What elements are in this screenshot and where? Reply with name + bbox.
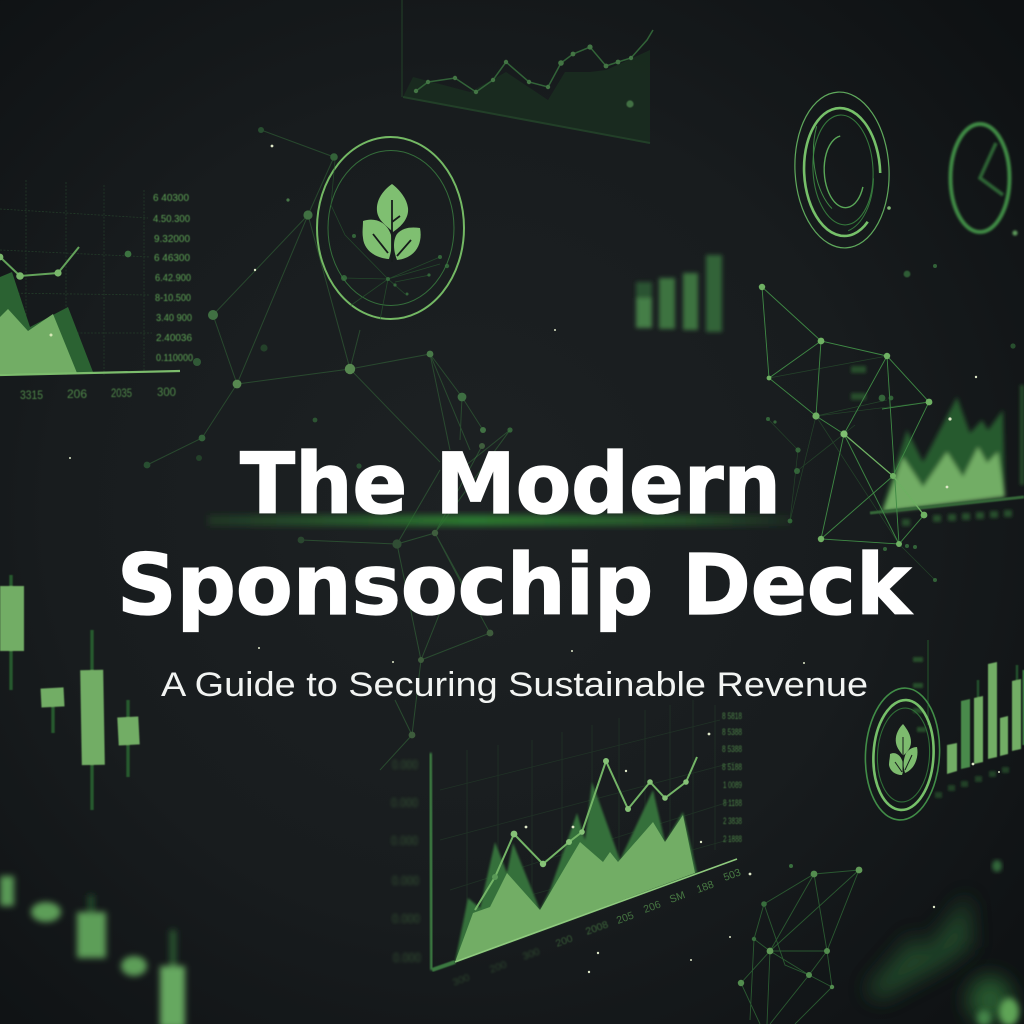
gauge dot <box>887 206 891 210</box>
bottom axis labels: 300 <box>451 971 472 989</box>
x axis labels <box>20 385 176 402</box>
right axis labels: 8 1188 <box>723 798 742 809</box>
x axis labels: 2035 <box>111 386 132 400</box>
blurred candlesticks <box>0 876 185 1024</box>
green glow streak <box>208 515 790 526</box>
y axis labels: 6 40300 <box>153 192 189 204</box>
y axis labels: 6.42.900 <box>155 272 191 284</box>
left axis labels: 0.000 <box>391 795 418 810</box>
network: left cluster <box>144 127 513 470</box>
title line 1: The Modern <box>240 435 781 533</box>
bottom axis labels: 300 <box>521 945 542 963</box>
right axis labels: 8 5818 <box>722 711 742 722</box>
right bar chart with small leaf emblem <box>862 640 1024 822</box>
right axis labels: 2 1888 <box>723 834 742 845</box>
outer ring <box>317 137 464 319</box>
left axis labels <box>391 757 421 965</box>
leaf emblem large <box>317 137 464 320</box>
subtitle: A Guide to Securing Sustainable Revenue <box>161 666 868 704</box>
network: bottom right cluster <box>738 864 862 1024</box>
left axis labels: 0.000 <box>391 833 418 848</box>
light area series <box>455 815 695 962</box>
left stock chart with axis labels <box>0 180 193 402</box>
network: center cluster <box>298 430 510 770</box>
left axis labels: 0.000 <box>393 950 421 965</box>
dark area series <box>455 782 697 962</box>
dark area series <box>0 272 93 374</box>
right axis labels: 8 5388 <box>722 744 742 755</box>
grid <box>440 700 735 930</box>
right axis labels <box>722 711 742 845</box>
x axis labels: 3315 <box>20 388 43 402</box>
panel axis <box>927 640 929 725</box>
left axis labels: 0.000 <box>392 911 420 926</box>
trend line <box>0 247 79 276</box>
x axis labels: 300 <box>157 385 176 399</box>
baseline <box>0 371 180 375</box>
y axis labels: 6 46300 <box>154 252 190 264</box>
top faded area chart <box>402 0 653 143</box>
right axis labels: 8 5188 <box>722 762 742 773</box>
bottom axis labels: 205 <box>615 909 636 927</box>
light area series <box>0 309 77 374</box>
left axis labels: 0.000 <box>392 873 419 888</box>
right axis labels: 8 5388 <box>722 727 742 738</box>
right axis labels: 2 3838 <box>723 816 742 827</box>
bottom axis labels: 503 <box>722 866 743 884</box>
y axis labels: 2.40036 <box>156 332 192 344</box>
blurred right area chart <box>851 366 1024 526</box>
right axis labels: 1 0089 <box>723 780 742 791</box>
bottom axis labels: 206 <box>642 898 663 916</box>
inner network <box>331 160 440 320</box>
left axis labels: 0.000 <box>392 757 418 772</box>
leaf icon <box>363 184 421 262</box>
y axis labels: 9.32000 <box>154 233 190 245</box>
scattered light specks <box>69 145 1000 973</box>
y axis labels: 0.110000 <box>156 352 193 364</box>
inner ring <box>328 150 454 306</box>
small leaf icon <box>889 724 918 775</box>
axes <box>430 753 432 970</box>
rings <box>862 686 943 822</box>
x axis labels: 206 <box>67 387 87 401</box>
concentric ring gauge <box>791 90 893 250</box>
blurred bar chart <box>636 255 722 332</box>
center perspective chart <box>391 700 743 989</box>
title line 2: Sponsochip Deck <box>117 536 913 634</box>
blurred bottom right shapes <box>866 860 1019 1024</box>
candlestick chart <box>0 575 140 810</box>
y axis labels: 8-10.500 <box>155 292 191 304</box>
network: right cluster <box>759 264 1016 582</box>
y axis labels: 4.50.300 <box>153 213 190 225</box>
pie outline chart <box>950 124 1018 236</box>
title <box>117 435 913 634</box>
trend line <box>475 757 697 910</box>
bottom axis labels: 188 <box>695 878 716 896</box>
bottom axis labels <box>451 866 743 989</box>
bottom axis labels: 200 <box>488 958 509 976</box>
bars <box>947 662 1024 774</box>
bottom axis labels: 200 <box>554 932 575 950</box>
bottom axis labels: 2008 <box>584 918 610 938</box>
bottom axis labels: SM <box>668 889 687 906</box>
y axis labels: 3.40 900 <box>156 312 192 324</box>
y axis labels <box>153 192 193 364</box>
